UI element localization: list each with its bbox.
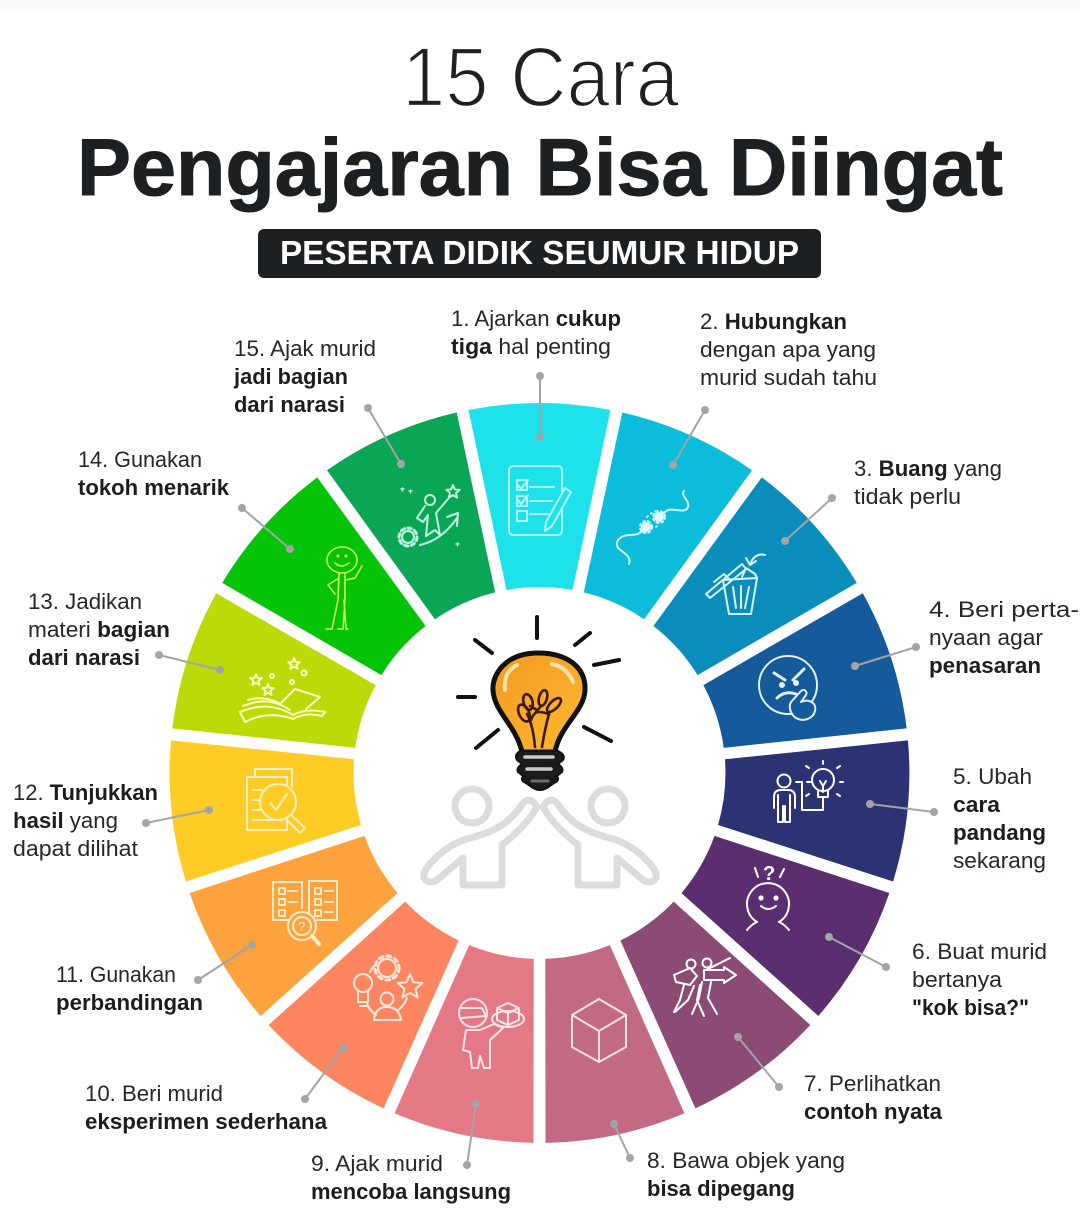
connector 7 bbox=[734, 1033, 783, 1091]
connector 4 bbox=[851, 643, 920, 670]
label 7: contoh nyata bbox=[804, 1099, 943, 1124]
label 5: sekarang bbox=[953, 848, 1046, 873]
icon: open book with stars bbox=[240, 658, 325, 722]
label 14 bbox=[78, 447, 230, 500]
label 13 bbox=[28, 589, 170, 670]
socket highlights bbox=[525, 757, 553, 769]
segment 13 bbox=[166, 591, 387, 784]
segment 9 bbox=[393, 937, 571, 1150]
icon: broken wire with puzzle pieces bbox=[617, 491, 688, 564]
label 12: dapat dilihat bbox=[13, 836, 138, 861]
icon: person holding box on tray bbox=[459, 999, 524, 1068]
label 15 bbox=[233, 336, 376, 417]
icon: curious smiling head bbox=[747, 863, 789, 930]
bulb rays bbox=[458, 617, 619, 748]
label 2 bbox=[700, 309, 877, 390]
label 14: tokoh menarik bbox=[78, 475, 230, 500]
label 5: pandang bbox=[953, 820, 1046, 845]
label 7: 7. Perlihatkan bbox=[804, 1071, 941, 1096]
label 4 bbox=[929, 597, 1079, 678]
label 6: 6. Buat murid bbox=[912, 939, 1047, 964]
connector 9 bbox=[463, 1100, 480, 1169]
connector 8 bbox=[610, 1120, 634, 1162]
label 10: 10. Beri murid bbox=[85, 1081, 223, 1106]
label 9 bbox=[311, 1151, 511, 1204]
connector 12 bbox=[142, 806, 213, 827]
label 10: eksperimen sederhana bbox=[85, 1109, 328, 1134]
label 13: 13. Jadikan bbox=[28, 589, 142, 614]
icon: thinking face bbox=[759, 656, 817, 720]
label 6: bertanya bbox=[912, 967, 1003, 992]
connector 14 bbox=[238, 504, 294, 553]
connector 1 bbox=[536, 372, 544, 441]
label 1: 1. Ajarkan cukup bbox=[451, 306, 621, 331]
bulb glass bbox=[493, 653, 585, 752]
label 2: dengan apa yang bbox=[700, 337, 876, 362]
label 13: materi bagian bbox=[28, 617, 170, 642]
label 15: jadi bagian bbox=[233, 364, 348, 389]
segment 5 bbox=[714, 722, 915, 882]
label 7 bbox=[804, 1071, 943, 1124]
bulb filament bbox=[516, 689, 563, 747]
connector 15 bbox=[364, 404, 405, 468]
connector 11 bbox=[194, 941, 256, 984]
connector 6 bbox=[825, 933, 890, 971]
label 9: 9. Ajak murid bbox=[311, 1151, 443, 1176]
label 2: 2. Hubungkan bbox=[700, 309, 847, 334]
segment 12 bbox=[164, 722, 365, 882]
label 3: tidak perlu bbox=[854, 484, 961, 509]
icon: two lists and magnifier: ? bbox=[298, 919, 305, 934]
connector lines bbox=[142, 372, 938, 1169]
icon: cube bbox=[572, 999, 626, 1062]
label 10 bbox=[85, 1081, 328, 1134]
segment 3 bbox=[628, 473, 862, 703]
label 9: mencoba langsung bbox=[311, 1179, 511, 1204]
icon: bulb gear star and person bbox=[354, 956, 422, 1020]
segment 7 bbox=[590, 879, 814, 1114]
subtitle banner: PESERTA DIDIK SEUMUR HIDUP bbox=[280, 234, 799, 271]
icon: two lists and magnifier bbox=[273, 881, 337, 944]
icon: documents and check magnifier bbox=[247, 769, 305, 833]
segment 8 bbox=[508, 937, 686, 1150]
icon: stick figure character bbox=[326, 547, 362, 629]
icon: checklist bbox=[509, 466, 571, 535]
connector 13 bbox=[155, 651, 224, 674]
connector 5 bbox=[866, 800, 938, 816]
label 11: perbandingan bbox=[56, 990, 203, 1015]
segment 6 bbox=[662, 803, 895, 1019]
segment 1 bbox=[468, 403, 610, 590]
segment 14 bbox=[217, 473, 451, 703]
label 1: tiga hal penting bbox=[451, 334, 611, 359]
icon: two people high five bbox=[424, 789, 656, 885]
segment 4 bbox=[692, 591, 913, 784]
label 6: "kok bisa?" bbox=[912, 995, 1029, 1020]
icon: two figures carrying arrow signs bbox=[674, 958, 736, 1016]
title line: Pengajaran Bisa Diingat: Pengajaran Bisa Diingat bbox=[77, 123, 1003, 213]
title line: 15 Cara: 15 Cara bbox=[402, 30, 679, 124]
icon: curious smiling head: ? bbox=[763, 863, 775, 885]
connector 2 bbox=[669, 406, 709, 469]
segment 2 bbox=[549, 406, 755, 635]
label 3 bbox=[854, 456, 1002, 509]
label 11 bbox=[56, 962, 203, 1015]
title block bbox=[77, 30, 1003, 278]
label 5: cara bbox=[953, 792, 1001, 817]
label 4: penasaran bbox=[929, 653, 1041, 678]
label 2: murid sudah tahu bbox=[700, 365, 877, 390]
label 4: 4. Beri perta- bbox=[929, 597, 1079, 622]
icon: trash can bbox=[706, 555, 765, 614]
panel: wheel segments bbox=[164, 403, 915, 1150]
icon: figure surfing arrow with gear and star bbox=[399, 485, 460, 546]
label 12: 12. Tunjukkan bbox=[13, 780, 158, 805]
text labels bbox=[13, 306, 1079, 1204]
label 5 bbox=[953, 764, 1046, 873]
connector 3 bbox=[781, 494, 836, 545]
segment 11 bbox=[184, 803, 417, 1019]
segment 10 bbox=[265, 879, 489, 1114]
label 6 bbox=[912, 939, 1047, 1020]
label 8: bisa dipegang bbox=[647, 1176, 795, 1201]
label 15: 15. Ajak murid bbox=[234, 336, 376, 361]
label 15: dari narasi bbox=[234, 392, 345, 417]
label 3: 3. Buang yang bbox=[854, 456, 1002, 481]
label 5: 5. Ubah bbox=[953, 764, 1032, 789]
bulb socket bbox=[516, 751, 564, 790]
connector 10 bbox=[301, 1044, 347, 1103]
subtitle banner bbox=[258, 229, 821, 278]
label 1 bbox=[451, 306, 621, 359]
segment 15 bbox=[324, 406, 530, 635]
label 12 bbox=[13, 780, 158, 861]
label 8 bbox=[647, 1148, 845, 1201]
icon: person and lightbulb bbox=[774, 761, 843, 822]
icon: glowing lightbulb bbox=[458, 617, 619, 790]
label 14: 14. Gunakan bbox=[78, 447, 202, 472]
label 11: 11. Gunakan bbox=[56, 962, 176, 987]
label 8: 8. Bawa objek yang bbox=[647, 1148, 845, 1173]
label 12: hasil yang bbox=[13, 808, 118, 833]
label 13: dari narasi bbox=[28, 645, 140, 670]
label 4: nyaan agar bbox=[929, 625, 1043, 650]
bulb highlight bbox=[505, 664, 573, 690]
